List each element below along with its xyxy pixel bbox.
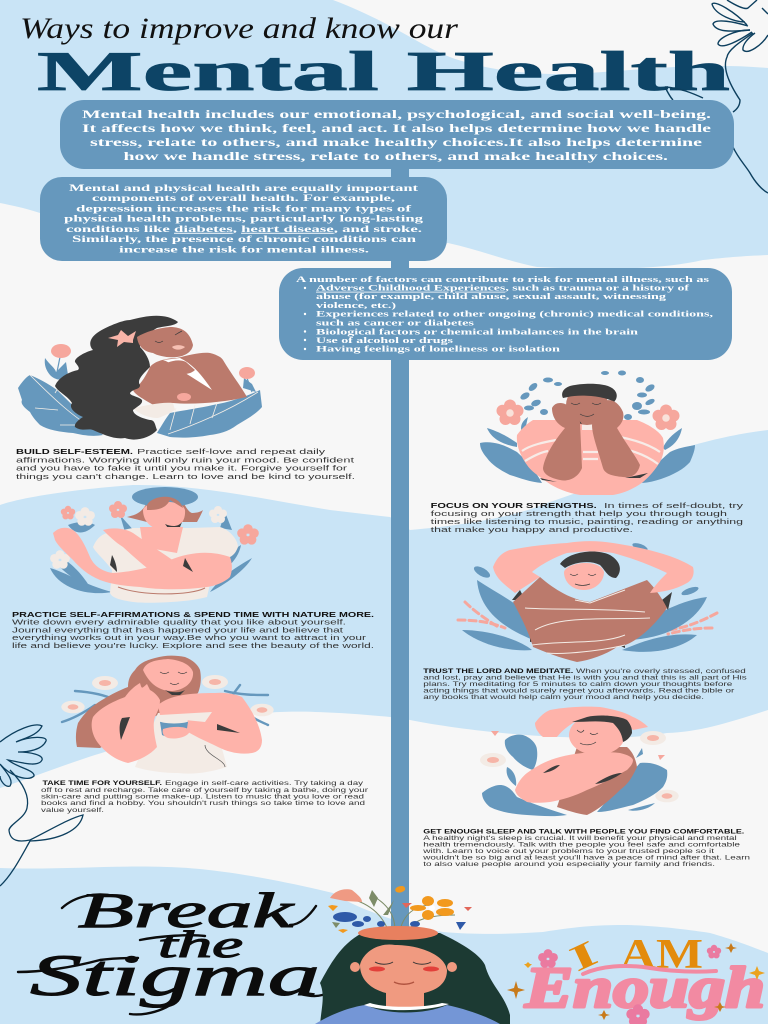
text: take time for yourself: books and find a hobby. You shouldn't rush things so take time to love and <box>41 800 365 807</box>
text: build self-esteem: things you can't change. Learn to love and be kind to yourself. <box>16 472 355 481</box>
panel: mental and physical health: components of overall health. For example, <box>92 194 395 204</box>
title: script line: Ways to improve and know our <box>20 12 458 45</box>
text: get enough sleep: A healthy night's sleep is crucial. It will benefit your physical and mental <box>423 835 737 842</box>
panel: risk factors: Adverse Childhood Experiences , such as trauma or a history of <box>316 284 689 293</box>
illustration: person resting with arm over head <box>480 707 679 816</box>
panel: risk factors: Having feelings of loneliness or isolation <box>316 345 561 354</box>
lettering: I am Enough: AM <box>620 932 703 978</box>
text: trust the lord and meditate: acting things that would surely regret you afterwards. Read the bible or <box>423 687 735 694</box>
vertical timeline bar <box>391 165 409 930</box>
text: trust the lord and meditate: any books that would help calm your mood and help you decide. <box>423 694 704 701</box>
text: focus on your strengths: FOCUS ON YOUR STRENGTHS. <box>431 501 597 510</box>
script heading: Break the Stigma <box>18 882 328 1014</box>
text: get enough sleep: health tremendously. Talk with the people you feel safe and comfortable <box>423 842 740 849</box>
text: practice self-affirmations: Write down every admirable quality that you like about yourself. <box>12 618 346 627</box>
panel: risk factors: violence, etc.) <box>316 301 396 310</box>
text: build self-esteem: Practice self-love and repeat daily <box>137 447 326 456</box>
panel: mental and physical health: depression increases the risk for many types of <box>76 204 413 214</box>
panel: mental and physical health: conditions like diabetes , heart disease , and stroke. <box>66 225 422 235</box>
illustration: woman with flowers growing from head <box>315 886 510 1024</box>
panel: mental and physical health: physical health problems, particularly long-lasting <box>64 214 424 224</box>
text: get enough sleep: GET ENOUGH SLEEP AND TALK WITH PEOPLE YOU FIND COMFORTABLE. <box>423 829 744 836</box>
panel: risk factors: abuse (for example, child abuse, sexual assault, witnessing <box>316 292 668 301</box>
panel: definition of mental health: how we handle stress, relate to others, and make healthy choices. <box>124 151 668 163</box>
lettering: I am Enough: Enough <box>524 955 765 1020</box>
illustration: woman applying skincare <box>61 656 274 774</box>
text: get enough sleep: wouldn't be so big and at least you'll have a peace of mind after that. Learn <box>422 854 750 861</box>
title: Mental Health: Mental Health <box>37 41 730 103</box>
text: take time for yourself: skin-care and putting some make-up. Listen to music that you love or read <box>41 794 364 800</box>
panel: mental and physical health: Similarly, the presence of chronic conditions can <box>72 235 417 245</box>
icon: line-drawn flower bottom left <box>0 725 83 886</box>
text: get enough sleep: to also value people around you especially your family and friends. <box>423 861 715 868</box>
text: build self-esteem: and you have to fake it until you make it. Forgive yourself for <box>16 464 348 473</box>
text: build self-esteem <box>16 447 355 481</box>
text: take time for yourself: Engage in self-care activities. Try taking a day <box>165 780 364 787</box>
panel: risk factors: Use of alcohol or drugs <box>316 336 453 345</box>
panel: risk factors <box>279 268 732 360</box>
illustration: man holding his cheeks <box>480 370 695 495</box>
panel: mental and physical health: Mental and physical health are equally important <box>69 184 420 194</box>
text: trust the lord and meditate: TRUST THE LORD AND MEDITATE. <box>423 668 574 675</box>
script heading: Break the Stigma: the <box>158 924 243 966</box>
lettering: I am Enough <box>507 932 765 1024</box>
text: get enough sleep: with. Learn to voice out your problems to your trusted people so it <box>422 848 714 855</box>
text: take time for yourself <box>41 780 369 814</box>
text: trust the lord and meditate: When you're overly stressed, confused <box>576 668 746 675</box>
text: focus on your strengths: that make you happy and productive. <box>431 525 633 534</box>
text: practice self-affirmations: Journal everything that has happened your life and believe that <box>12 626 343 635</box>
text: build self-esteem: BUILD SELF-ESTEEM. <box>16 447 133 456</box>
panel: mental and physical health <box>40 177 447 261</box>
panel: risk factors: A number of factors can contribute to risk for mental illness, such as <box>296 275 709 284</box>
illustration: woman with blue hat <box>50 487 259 603</box>
text: practice self-affirmations: PRACTICE SELF-AFFIRMATIONS & SPEND TIME WITH NATURE MORE. <box>12 610 374 619</box>
icon: line-drawn flower top right <box>665 0 768 193</box>
panel: definition of mental health <box>60 100 734 169</box>
text: take time for yourself: off to rest and recharge. Take care of yourself by taking a bathe, doing your <box>41 787 369 794</box>
text: focus on your strengths: In times of self-doubt, try <box>604 501 744 510</box>
text: focus on your strengths: times like listening to music, painting, reading or anything <box>431 517 743 526</box>
panel: definition of mental health: Mental health includes our emotional, psychological, and social well-being. <box>82 109 711 121</box>
text: practice self-affirmations: everything works out in your way.Be who you want to attract in your <box>12 633 367 642</box>
text: take time for yourself: TAKE TIME FOR YOURSELF. <box>42 780 162 787</box>
text: trust the lord and meditate: plans. Try meditating for 5 minutes to calm down your thoughts before <box>423 681 733 688</box>
text: focus on your strengths <box>431 501 744 534</box>
text: build self-esteem: affirmations. Worrying will only ruin your mood. Be confident <box>16 455 354 464</box>
panel: risk factors: Biological factors or chemical imbalances in the brain <box>316 327 639 336</box>
text: practice self-affirmations <box>12 610 374 650</box>
script heading: Break the Stigma: Stigma <box>30 943 320 1008</box>
text: trust the lord and meditate <box>423 668 748 701</box>
lettering: I am Enough: I <box>563 932 604 980</box>
script heading: Break the Stigma: Break <box>78 882 294 938</box>
panel: mental and physical health: increase the risk for mental illness. <box>119 246 369 256</box>
panel: risk factors: such as cancer or diabetes <box>316 318 474 327</box>
text: practice self-affirmations: life and believe you're lucky. Explore and see the beauty of the world. <box>12 641 374 650</box>
illustration: woman with long hair <box>18 316 262 440</box>
panel: definition of mental health: It affects how we think, feel, and act. It also helps determine how we handle <box>82 123 711 135</box>
text: get enough sleep <box>422 829 750 868</box>
text: focus on your strengths: focusing on your strength that help you through tough <box>431 509 727 518</box>
illustration: man with arms overhead <box>458 541 717 662</box>
text: take time for yourself: value yourself. <box>41 807 104 814</box>
text: trust the lord and meditate: and lost, pray and believe that He is with you and that this is all part of His <box>423 674 748 681</box>
panel: definition of mental health: stress, relate to others, and make healthy choices.It also helps determine <box>90 137 702 149</box>
panel: risk factors: Experiences related to other ongoing (chronic) medical conditions, <box>316 310 713 319</box>
